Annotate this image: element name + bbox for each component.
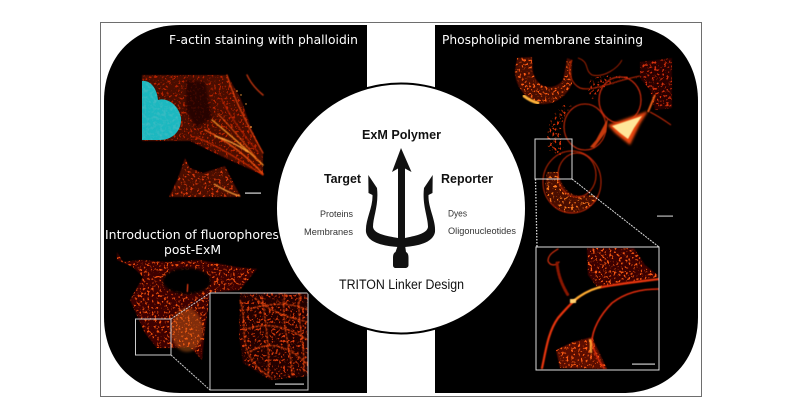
scale bar: [657, 216, 673, 217]
speckled crescent of middle cell: [547, 104, 572, 156]
lower ring: [545, 172, 599, 213]
label: Reporter: Reporter: [441, 172, 493, 186]
selection box and dotted connector lines: [535, 139, 659, 247]
heading: Phospholipid membrane staining: Phospholipid membrane staining: [442, 33, 643, 47]
right speckled region: [640, 58, 672, 110]
list: reporter types: [448, 208, 516, 237]
central circle: [276, 84, 526, 334]
list: reporter types: Oligonucleotides: [448, 226, 516, 237]
cell crescent: [515, 57, 572, 104]
right prong: [405, 175, 435, 247]
list: reporter types: Dyes: [448, 208, 467, 220]
heading: F-actin staining with phalloidin: F-actin staining with phalloidin: [169, 33, 358, 47]
arrow shaft and head: [392, 148, 412, 247]
lower cell: [169, 158, 241, 197]
scale bar: [245, 192, 261, 194]
infographic: [100, 22, 702, 397]
icon: trident linker: [366, 148, 435, 268]
cell walls: [564, 58, 671, 150]
heading: Introduction of fluorophores post-ExM: post-ExM: [164, 243, 221, 257]
nucleus: [142, 81, 181, 140]
list: target types: Membranes: [304, 227, 353, 238]
outer frame: [100, 22, 702, 396]
band above the big ring: [588, 75, 640, 100]
inset: membrane zoomed view: [536, 247, 659, 370]
left prong: [366, 175, 398, 247]
list: target types: Proteins: [320, 209, 353, 220]
label: Target: Target: [324, 172, 362, 186]
label: ExM Polymer: ExM Polymer: [362, 128, 441, 142]
panel: F-actin and post-ExM fluorophores: [104, 25, 367, 393]
panel: phospholipid membrane staining: [435, 25, 698, 393]
heading: Introduction of fluorophores post-ExM: [105, 228, 279, 257]
base: [393, 245, 408, 268]
micrograph: post-ExM cell: [117, 252, 257, 360]
bright cell hotspot: [608, 111, 648, 145]
list: target types: [304, 209, 353, 238]
selection box and connector lines: [136, 293, 210, 390]
micrograph: F-actin cell with nucleus: [142, 75, 263, 197]
caption: TRITON Linker Design: TRITON Linker Design: [339, 277, 464, 292]
heading: Introduction of fluorophores post-ExM: Introduction of fluorophores: [105, 228, 279, 242]
micrograph: phospholipid-stained cells: [515, 57, 672, 213]
inset: post-ExM zoomed cell edge: [210, 293, 308, 390]
